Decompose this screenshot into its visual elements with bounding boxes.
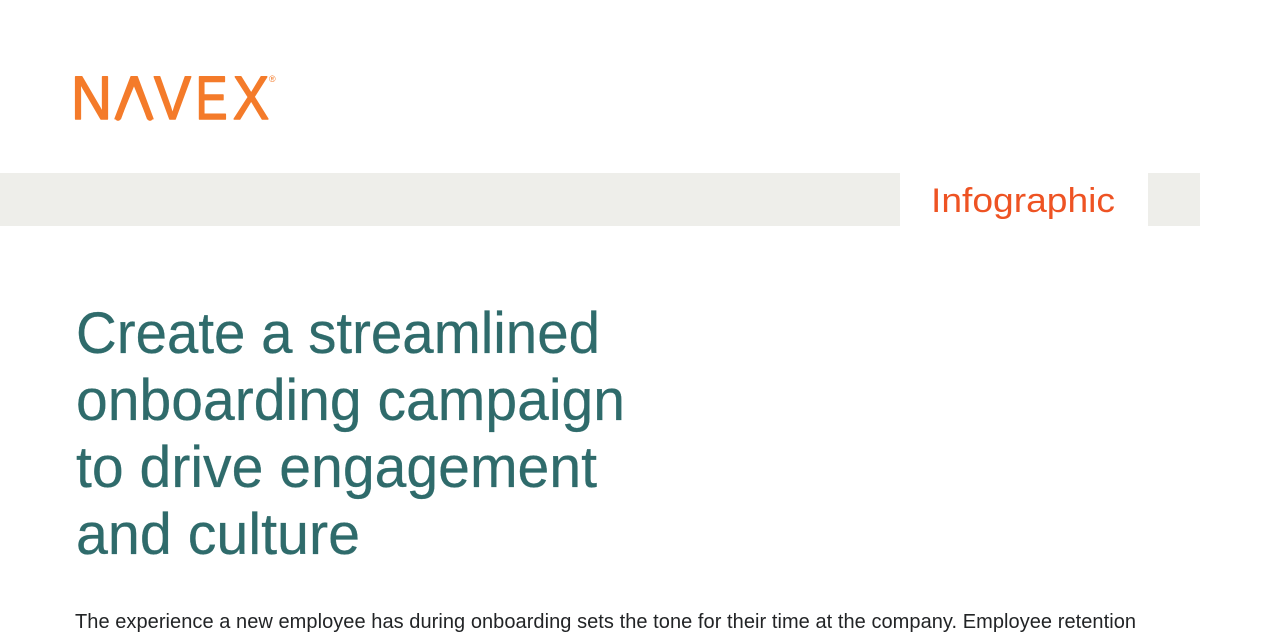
logo: NAVEX: A bbox=[115, 64, 153, 132]
title: Create a streamlined bbox=[76, 301, 600, 366]
logo: NAVEX: ® bbox=[269, 74, 276, 84]
label: Infographic: Infographic bbox=[931, 182, 1115, 220]
logo: NAVEX bbox=[71, 64, 276, 132]
title bbox=[76, 301, 625, 567]
title: onboarding campaign bbox=[76, 368, 625, 433]
header band bbox=[0, 173, 1200, 226]
logo: NAVEX: V bbox=[154, 64, 191, 132]
body text: The experience a new employee has during onboarding sets the tone for their time at the company. Employee retention bbox=[75, 611, 1136, 633]
title: and culture bbox=[76, 502, 360, 567]
logo: NAVEX: E bbox=[196, 64, 228, 132]
logo: NAVEX: N bbox=[71, 64, 112, 132]
title: to drive engagement bbox=[76, 435, 597, 500]
logo: NAVEX: X bbox=[233, 64, 269, 132]
